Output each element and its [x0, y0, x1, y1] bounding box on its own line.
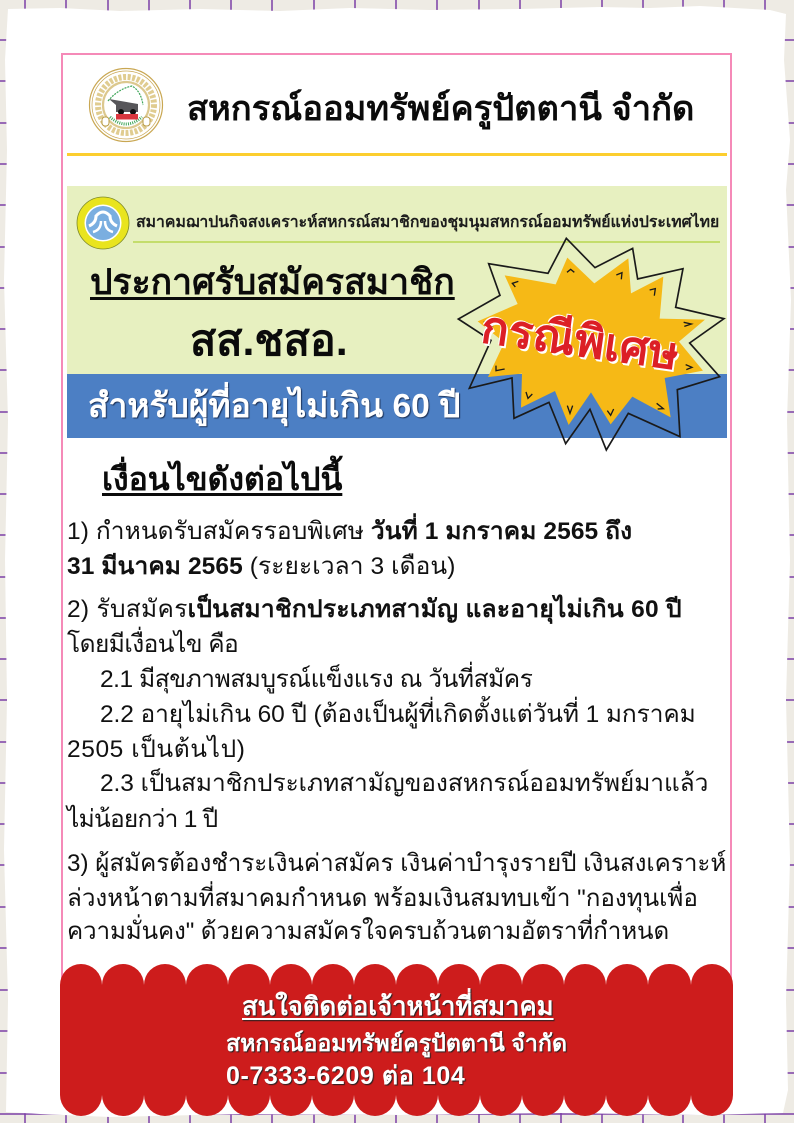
text block: condition 3 [67, 850, 726, 945]
green underline [133, 241, 720, 243]
heading: age limit: สำหรับผู้ที่อายุไม่เกิน 60 ปี [88, 388, 460, 425]
icon: cooperative seal logo [88, 68, 164, 142]
yellow divider [67, 153, 727, 156]
text block: condition 2: โดยมีเงื่อนไข คือ [67, 631, 238, 658]
badge label: กรณีพิเศษ [478, 301, 682, 380]
text block: condition 2: 2.3 เป็นสมาชิกประเภทสามัญของสหกรณ์ออมทรัพย์มาแล้ว [100, 770, 708, 797]
text block: condition 2: 2.2 อายุไม่เกิน 60 ปี (ต้องเป็นผู้ที่เกิดตั้งแต่วันที่ 1 มกราคม [100, 701, 696, 728]
text block: condition 2 [65, 594, 708, 833]
contact phone: 0-7333-6209 ต่อ 104 [226, 1062, 465, 1090]
text block: condition 3: ความมั่นคง" ด้วยความสมัครใจครบถ้วนตามอัตราที่กำหนด [67, 918, 669, 945]
title: สหกรณ์ออมทรัพย์ครูปัตตานี จำกัด [187, 90, 694, 128]
text block: condition 2: 2) รับสมัครเป็นสมาชิกประเภทสามัญ และอายุไม่เกิน 60 ปี [67, 596, 682, 623]
contact heading: สนใจติดต่อเจ้าหน้าที่สมาคม [242, 993, 554, 1021]
pink content frame [61, 53, 732, 1053]
text block: condition 1 [67, 513, 632, 580]
text block: condition 1: 1) กำหนดรับสมัครรอบพิเศษ วันที่ 1 มกราคม 2565 ถึง [67, 518, 632, 545]
text block: condition 3: ล่วงหน้าตามที่สมาคมกำหนด พร้อมเงินสมทบเข้า "กองทุนเพื่อ [67, 885, 698, 912]
text block: condition 3: 3) ผู้สมัครต้องชำระเงินค่าสมัคร เงินค่าบำรุงรายปี เงินสงเคราะห์ [67, 850, 726, 877]
text block: condition 1: 31 มีนาคม 2565 (ระยะเวลา 3 เดือน) [67, 553, 456, 580]
heading: conditions: เงื่อนไขดังต่อไปนี้ [102, 461, 342, 497]
text block: condition 2: 2505 เป็นต้นไป) [67, 736, 245, 763]
heading: organisation: สส.ชสอ. [190, 317, 348, 365]
panel: green announcement [67, 186, 727, 374]
text block: condition 2: 2.1 มีสุขภาพสมบูรณ์แข็งแรง ณ วันที่สมัคร [100, 666, 532, 693]
contact organisation: สหกรณ์ออมทรัพย์ครูปัตตานี จำกัด [226, 1030, 567, 1056]
text block: condition 2: ไม่น้อยกว่า 1 ปี [67, 806, 217, 833]
heading: announcement: ประกาศรับสมัครสมาชิก [90, 262, 455, 302]
association name: สมาคมฌาปนกิจสงเคราะห์สหกรณ์สมาชิกของชุมนุมสหกรณ์ออมทรัพย์แห่งประเทศไทย [136, 214, 719, 231]
panel: blue band [67, 374, 727, 438]
icon: association logo [76, 196, 130, 250]
